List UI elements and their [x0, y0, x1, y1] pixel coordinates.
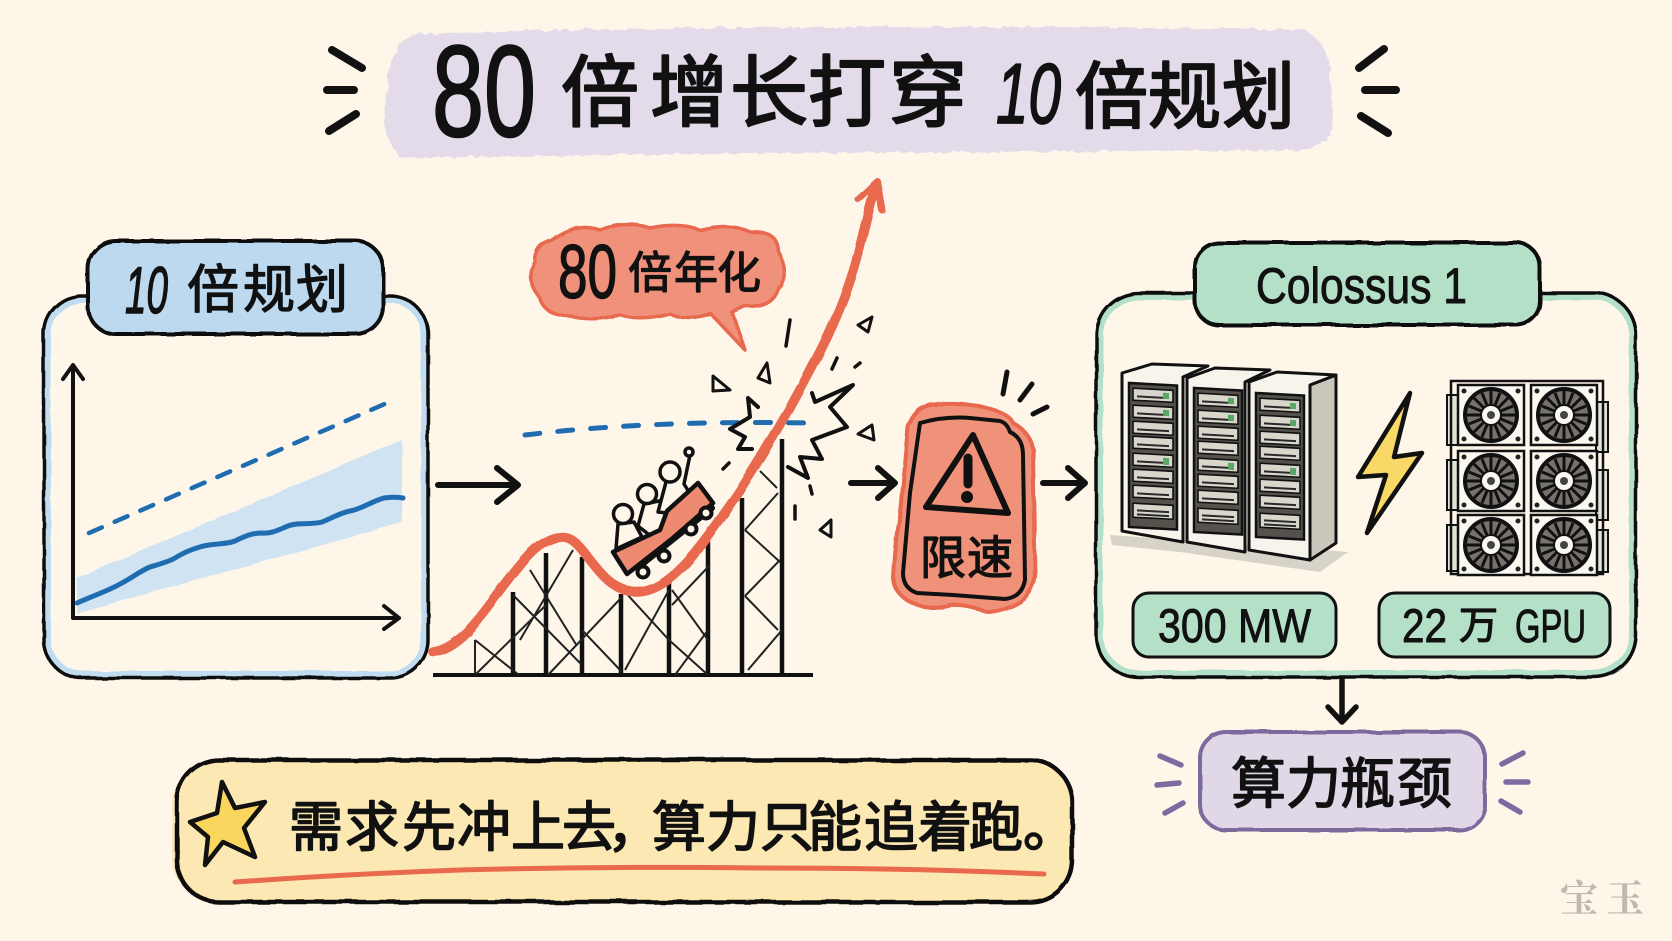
bottleneck badge — [1157, 732, 1528, 830]
coaster support structure — [433, 439, 813, 675]
watermark: 宝玉 — [1560, 879, 1644, 921]
title text: 10 — [996, 47, 1061, 142]
title text: 倍增长打穿 — [561, 49, 967, 137]
tab heading: 倍规划 — [187, 262, 348, 320]
tab heading: Colossus 1 — [1256, 258, 1467, 314]
title brush highlight — [384, 27, 1333, 158]
growth curve arrow — [433, 181, 882, 652]
icon: star — [190, 782, 265, 865]
panel frame — [44, 296, 428, 678]
warning triangle — [926, 435, 1008, 513]
title — [327, 18, 1396, 164]
title text: 倍规划 — [1075, 57, 1295, 138]
coaster cart — [613, 483, 713, 578]
arrow: coaster to speed limit — [851, 468, 895, 498]
panel: Colossus 1 — [1096, 243, 1636, 677]
speed limit sign — [893, 372, 1047, 612]
takeaway banner — [172, 760, 1077, 903]
sign body — [893, 403, 1035, 612]
badge body — [1200, 732, 1485, 830]
sign alert ticks — [1003, 372, 1047, 414]
badge text: 算力瓶颈 — [1231, 753, 1452, 815]
panel tab — [1195, 243, 1540, 325]
sign text: 限速 — [920, 532, 1013, 584]
banner underline — [235, 867, 1044, 882]
icon: lightning bolt — [1358, 393, 1422, 533]
title text: 80 — [432, 18, 536, 164]
tab heading — [125, 253, 348, 327]
panel frame — [1096, 293, 1636, 677]
chip: GPU count: 22 — [1402, 599, 1447, 652]
chip: GPU count: 万 — [1459, 605, 1498, 648]
actual line — [77, 497, 403, 603]
title text — [432, 18, 1295, 164]
rack 1 — [1122, 364, 1208, 542]
chart: planned vs actual — [63, 365, 403, 629]
chart axes — [63, 365, 399, 629]
speech bubble: 倍年化 — [628, 249, 761, 298]
riders — [614, 448, 694, 549]
rack 3 — [1249, 372, 1336, 560]
chip: GPU count — [1379, 593, 1610, 657]
forecast band — [77, 440, 402, 613]
crash burst — [713, 317, 874, 537]
speech bubble: 80 — [558, 230, 617, 315]
planned level dashed line — [525, 422, 807, 435]
panel tab — [88, 241, 383, 334]
GPU fan array — [1447, 381, 1608, 575]
panel: 10x plan — [44, 241, 428, 678]
speech bubble — [531, 224, 784, 350]
rack 2 — [1187, 368, 1270, 552]
exclamation mark — [961, 458, 973, 503]
title accent ticks — [327, 49, 1396, 133]
planned dashed line — [89, 403, 387, 533]
chip: power: 300 MW — [1158, 599, 1312, 652]
arrow: speed limit to Colossus — [1043, 468, 1085, 498]
banner text: 需求先冲上去，算力只能追着跑。 — [289, 798, 1077, 858]
arrow: Colossus to bottleneck — [1328, 679, 1356, 722]
badge ticks — [1157, 753, 1528, 813]
server racks — [1110, 364, 1348, 572]
roller coaster illustration — [433, 181, 882, 675]
tab heading: 10 — [125, 253, 168, 327]
banner body — [172, 760, 1072, 903]
chip: GPU count: GPU — [1515, 600, 1586, 652]
sign inner outline — [903, 418, 1025, 599]
arrow: plan to coaster — [438, 468, 518, 502]
